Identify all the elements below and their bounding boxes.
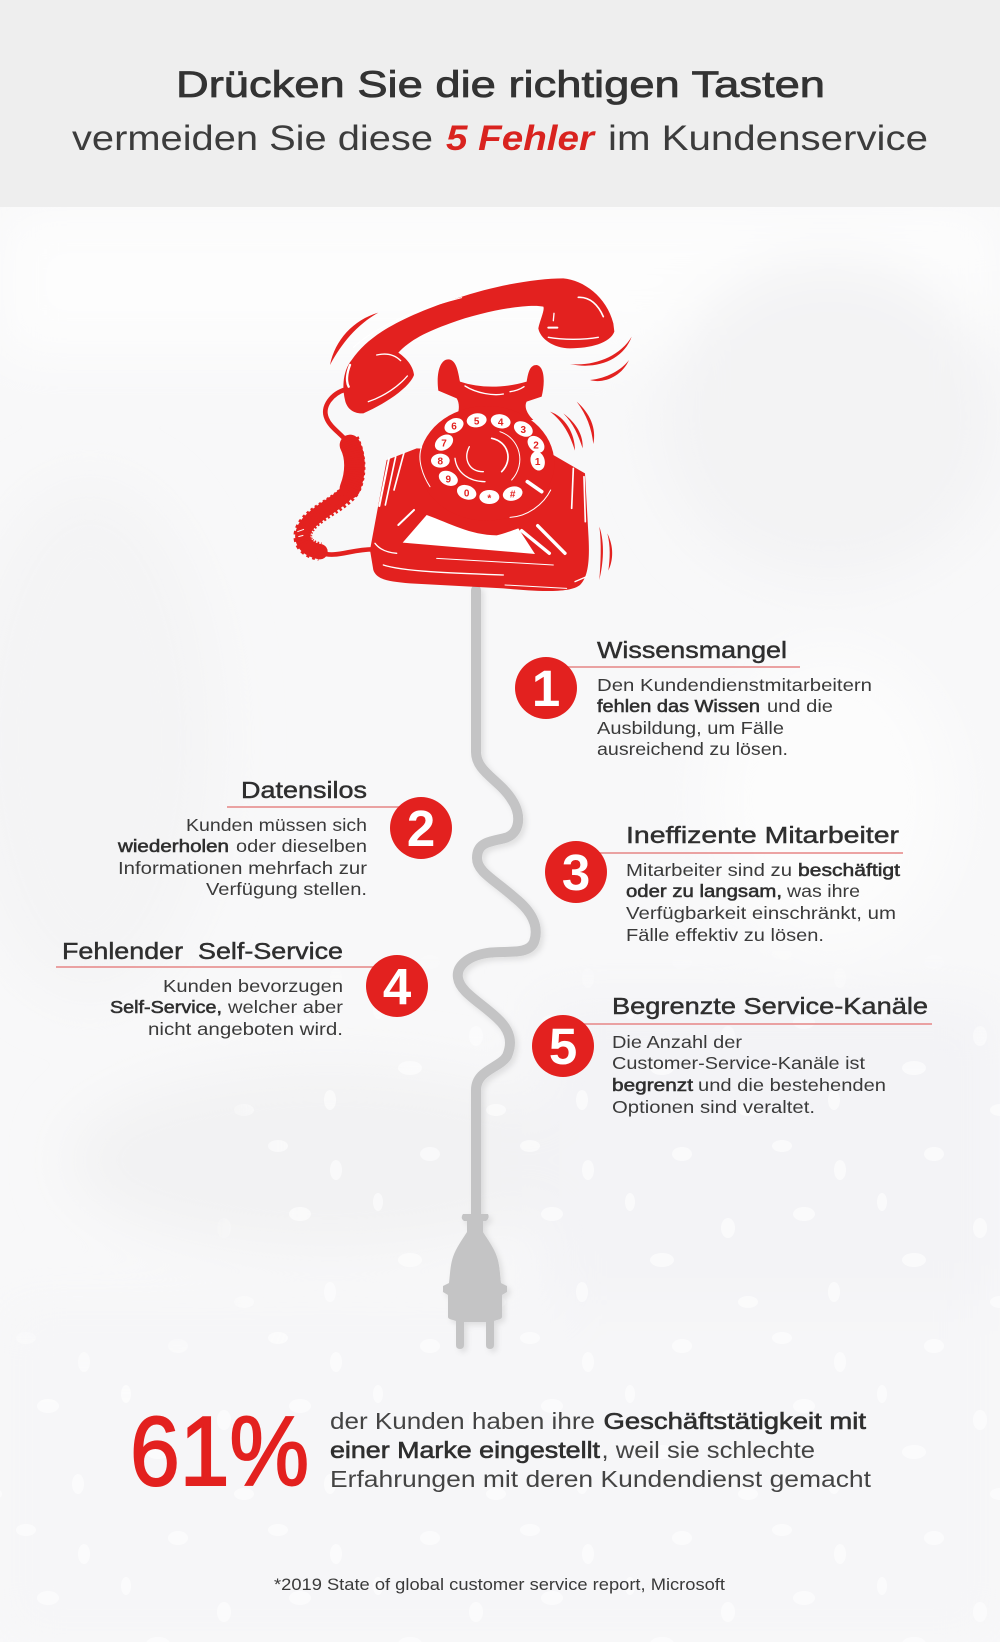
statistic: 61%: 61%: [130, 1396, 309, 1506]
heading 3: Ineffizente Mitarbeiter: [626, 822, 899, 848]
body 2: Verfügung stellen.: [206, 879, 367, 899]
body 5: [612, 1032, 886, 1117]
body 4: Kunden bevorzugen: [163, 976, 343, 996]
item 5: Begrenzte Service-Kanäle: [532, 993, 932, 1117]
shake lines: [330, 313, 632, 580]
handset: [343, 278, 614, 413]
body 5: Optionen sind veraltet.: [612, 1097, 815, 1117]
base highlights: [375, 453, 587, 588]
dial holes with digits: 8: [438, 457, 444, 468]
icon: plug: [443, 1214, 507, 1349]
body 2: Informationen mehrfach zur: [118, 858, 367, 878]
body 3: was ihre: [786, 881, 860, 901]
statistic description: Geschäftstätigkeit mit: [604, 1408, 867, 1434]
body 5: begrenzt: [612, 1075, 693, 1095]
rotary dial: [419, 406, 554, 521]
item 3: Ineffizente Mitarbeiter: [545, 822, 903, 945]
body 4: [110, 976, 343, 1039]
dial holes with digits: 7: [441, 439, 447, 450]
body 1: und die: [767, 696, 833, 716]
statistic description: , weil sie schlechte: [602, 1437, 815, 1463]
body 2: oder dieselben: [236, 836, 367, 856]
badge 2: 2: [407, 800, 435, 857]
statistic description: der Kunden haben ihre: [330, 1408, 595, 1434]
body 4: Self-Service,: [110, 997, 222, 1017]
source footnote: *2019 State of global customer service report, Microsoft: [274, 1576, 725, 1594]
statistic description: einer Marke eingestellt: [330, 1437, 601, 1463]
handset highlights: [347, 297, 603, 402]
body 1: Den Kundendienstmitarbeitern: [597, 675, 872, 695]
body 3: Verfügbarkeit einschränkt, um: [626, 903, 896, 923]
dial holes with digits: 3: [521, 425, 527, 436]
badge 1: [515, 657, 577, 719]
statistic description: Erfahrungen mit deren Kundendienst gemacht: [330, 1466, 872, 1492]
body 3: Mitarbeiter sind zu: [626, 860, 792, 880]
subtitle: 5 Fehler: [446, 119, 597, 158]
item 4: Fehlender Self-Service: [56, 938, 428, 1039]
dial holes with digits: 5: [474, 416, 480, 427]
subtitle: im Kundenservice: [608, 119, 928, 158]
dial arcs and finger stop: [420, 432, 551, 517]
heading 2: Datensilos: [241, 777, 367, 803]
heading 5: Begrenzte Service-Kanäle: [612, 993, 928, 1019]
dial holes with digits: 2: [533, 440, 539, 451]
body 2: [117, 815, 367, 899]
item 1: Wissensmangel: [515, 637, 872, 759]
phone base: [370, 448, 589, 591]
body 3: Fälle effektiv zu lösen.: [626, 925, 824, 945]
body 1: [597, 675, 872, 759]
body 3: oder zu langsam,: [626, 881, 782, 901]
badge 5: 5: [549, 1018, 577, 1075]
dial holes with digits: 9: [446, 474, 452, 485]
body 4: nicht angeboten wird.: [148, 1019, 343, 1039]
heading 4: Fehlender Self-Service: [62, 938, 343, 964]
dial holes with digits: *: [487, 493, 491, 504]
body 1: ausreichend zu lösen.: [597, 739, 788, 759]
badge 4: 4: [383, 958, 412, 1015]
title: [72, 64, 928, 158]
dial holes with digits: 0: [464, 488, 470, 499]
icon: red rotary telephone: [297, 278, 632, 591]
base opening: [403, 515, 535, 554]
dial holes with digits: 1: [535, 457, 541, 468]
body 2: wiederholen: [117, 836, 229, 856]
body 3: beschäftigt: [798, 860, 900, 880]
badge 4: [366, 955, 428, 1017]
body 1: Ausbildung, um Fälle: [597, 718, 784, 738]
body 1: fehlen das Wissen: [597, 696, 760, 716]
body 3: [626, 860, 900, 945]
curly cord: [325, 389, 347, 442]
item 2: Datensilos: [117, 777, 452, 899]
body 5: Customer-Service-Kanäle ist: [612, 1053, 865, 1073]
badge 1: 1: [532, 660, 560, 717]
dial holes with digits: 6: [451, 422, 457, 433]
body 5: Die Anzahl der: [612, 1032, 742, 1052]
cradle: [438, 359, 544, 423]
badge 2: [390, 797, 452, 859]
badge 3: [545, 841, 607, 903]
dial holes with digits: 4: [498, 417, 504, 428]
subtitle: vermeiden Sie diese: [72, 119, 433, 158]
dial holes with digits: [431, 412, 548, 504]
badge 3: 3: [562, 844, 590, 901]
title: Drücken Sie die richtigen Tasten: [176, 64, 825, 105]
header band: [0, 0, 1000, 207]
body 5: und die bestehenden: [698, 1075, 886, 1095]
heading 1: Wissensmangel: [597, 637, 787, 663]
cord and plug: [443, 590, 536, 1349]
statistic description: [330, 1408, 872, 1492]
badge 5: [532, 1015, 594, 1077]
dial holes with digits: #: [510, 490, 516, 501]
body 4: welcher aber: [227, 997, 343, 1017]
subtitle: [72, 119, 928, 158]
body 2: Kunden müssen sich: [186, 815, 367, 835]
